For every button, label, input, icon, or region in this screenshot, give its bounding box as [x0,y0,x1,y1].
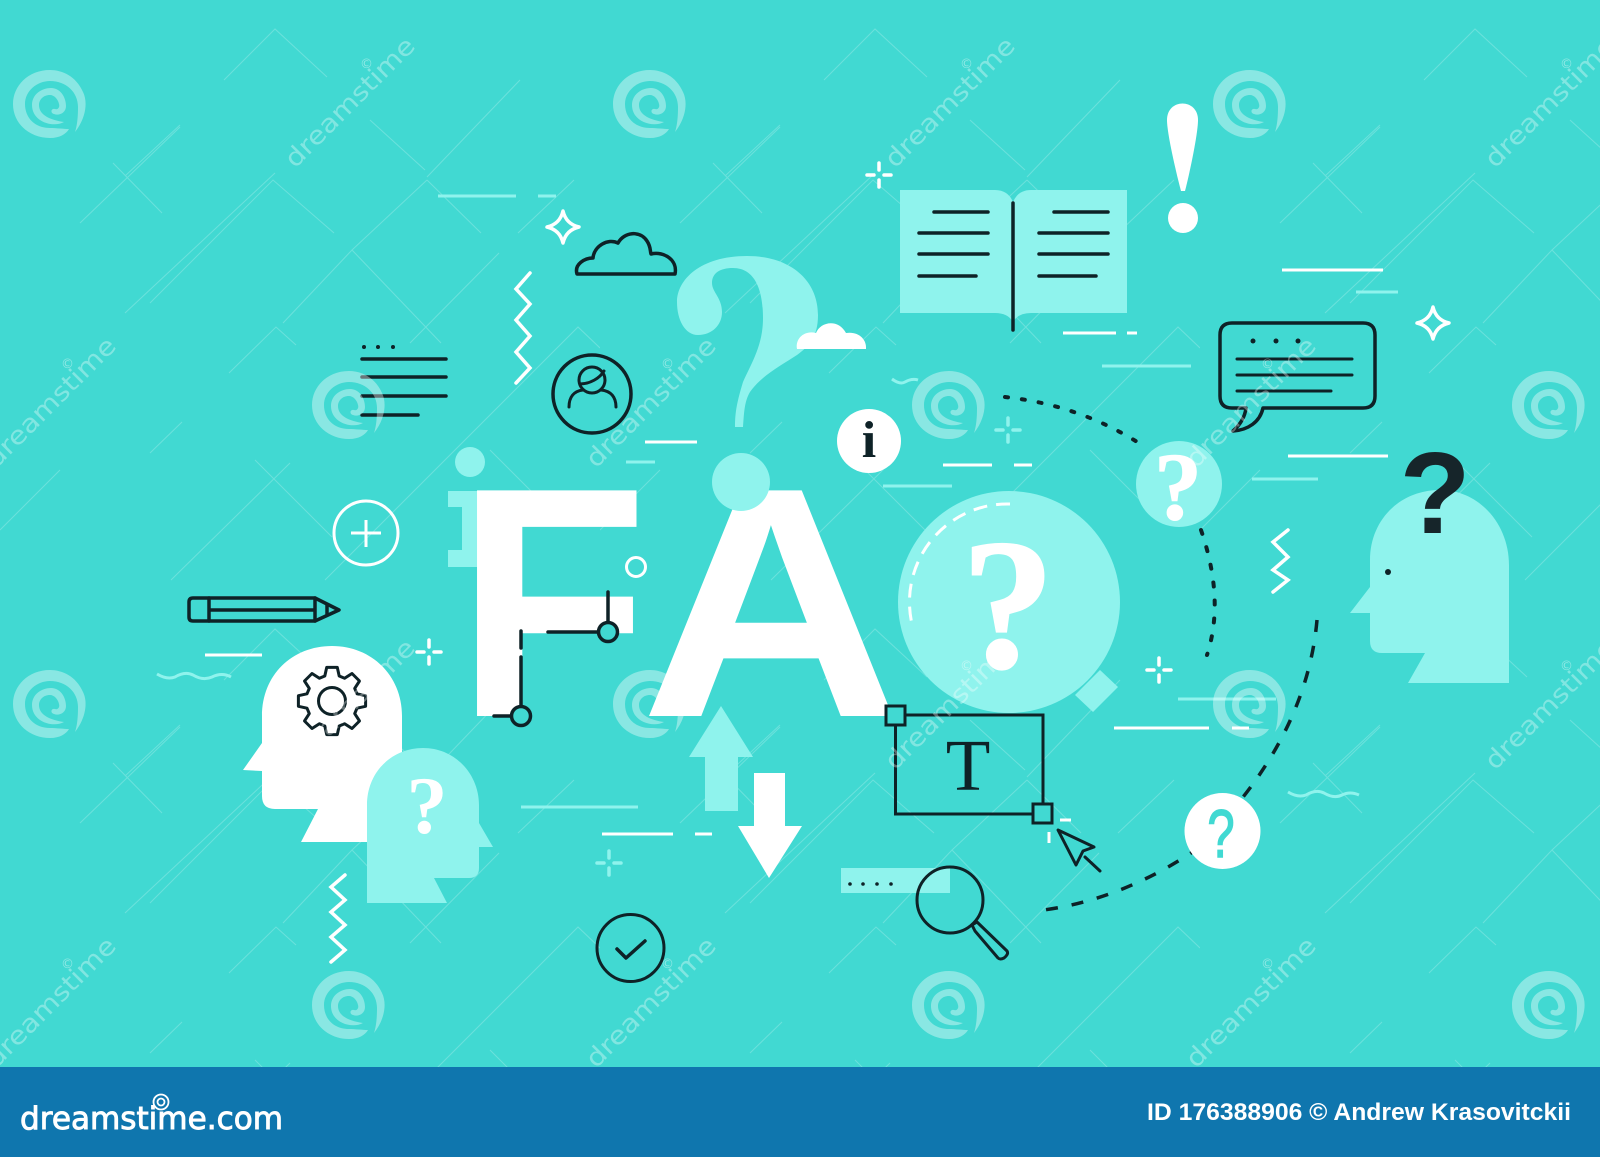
decorative short lines [157,196,1398,834]
watermark text: dreamstime [879,31,1021,173]
icon: light head with question [367,748,493,903]
icon: white question circle: ? [1207,795,1235,872]
icon: arrow down [738,773,802,878]
footer logo: dreamstime.com [20,1101,283,1137]
icon: light slab i behind F [448,447,493,567]
watermark text: dreamstime [279,31,421,173]
icon: small white cloud [797,323,866,349]
watermark text: dreamstime [879,633,1021,775]
watermark text: © [661,957,674,972]
icon: cursor [1049,820,1100,871]
icon: big light question mark [677,256,818,427]
icon: plus circle [334,501,398,565]
title letter: F: F [456,419,648,786]
icon: right head with question: ? [1400,428,1470,558]
watermark text: © [960,57,973,72]
icon: plus sparkles [417,163,1171,875]
icon: search bar and magnifier [841,867,1008,959]
icon: cloud outline [576,234,675,274]
icon: light head with question: ? [406,760,448,851]
footer credit: ID 176388906 © Andrew Krasovitckii [1147,1099,1571,1126]
icon: info circle [837,409,901,473]
watermark text: © [360,57,373,72]
icon: sparkle right [1417,307,1449,339]
watermark text: © [360,659,373,674]
icon: light question circle: ? [1154,433,1202,540]
icon: text box with handles [886,706,1052,823]
footer bar [0,1067,1600,1157]
apex circle on A [712,453,770,511]
icon: gear [298,667,366,735]
dashed connector: right arc [1201,530,1215,655]
icon: document lines [362,345,446,415]
watermark text: © [1261,357,1274,372]
watermark text: dreamstime [580,931,722,1073]
icon: pencil [189,598,339,621]
icon: open book [900,190,1127,330]
watermark text: dreamstime [1180,331,1322,473]
icon: white question circle [1184,793,1260,872]
Q: magnifying circle with tail: ? [962,502,1054,708]
icon: info circle: i [862,412,876,469]
icon: user in circle [553,355,631,433]
icon: exclamation mark [1167,104,1198,233]
watermark text: dreamstime [580,331,722,473]
watermark text: © [661,357,674,372]
icon: speech bubble [1220,323,1375,431]
watermark text: © [1560,659,1573,674]
watermark text: © [61,957,74,972]
icon: sparkle left [547,211,579,243]
icon: arrow up [689,706,753,811]
Q: magnifying circle with tail [898,491,1120,713]
watermark text: © [1560,57,1573,72]
icon: light question circle [1136,433,1222,540]
icon: text box with handles: T [946,725,990,806]
icon: white head with gear [243,646,402,842]
dashed connector: long arc [1035,620,1317,911]
watermark text: dreamstime [279,633,421,775]
watermark text: © [1261,957,1274,972]
watermark text: © [61,357,74,372]
small ring [626,558,646,576]
zigzags [331,273,1288,962]
dashed connector: upper arc [1005,397,1142,445]
icon: right head with question [1350,428,1509,683]
watermark text: © [960,659,973,674]
F annotation handles [494,592,618,726]
icon: check circle [597,914,664,982]
watermark text: dreamstime [1180,931,1322,1073]
title letter: A: A [640,419,902,786]
